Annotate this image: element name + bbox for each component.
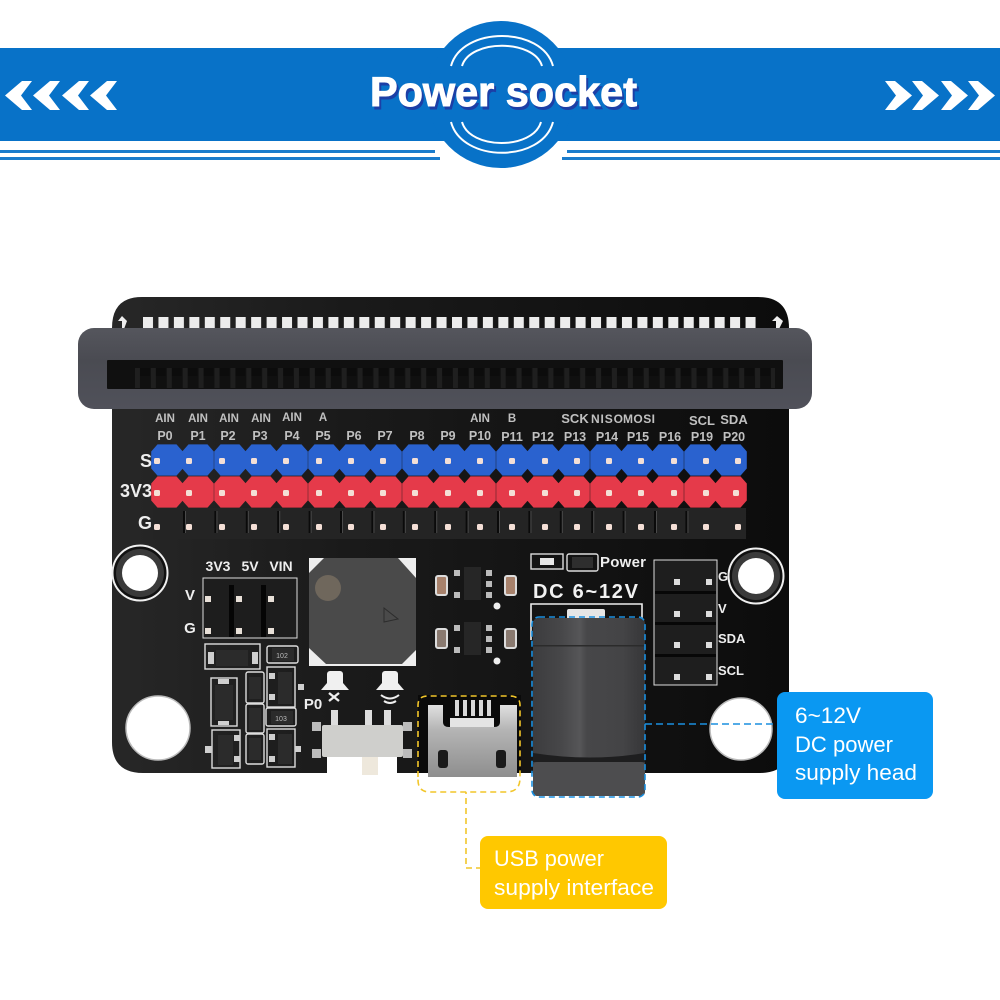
LED resistor	[567, 554, 598, 571]
callout text	[494, 846, 654, 900]
header block	[203, 578, 297, 638]
capacitors	[436, 576, 516, 648]
test points	[494, 602, 500, 664]
header row dividers	[655, 591, 716, 657]
pin labels bottom row: P7	[377, 429, 393, 443]
pin labels top row: SDA	[720, 412, 748, 427]
mute bell icon	[321, 671, 349, 690]
pin labels bottom row: P1	[190, 429, 206, 443]
header labels: G	[184, 620, 196, 637]
header labels: SCL	[718, 663, 744, 678]
pin labels top row: AIN	[188, 413, 208, 425]
pin labels bottom row: P15	[627, 430, 649, 444]
USB leader line	[466, 792, 481, 868]
row labels: G	[138, 513, 152, 533]
left chevrons	[5, 81, 117, 110]
header banner	[0, 21, 1000, 168]
header pins	[674, 579, 712, 680]
callout text: supply head	[795, 760, 917, 785]
DC voltage label: DC 6~12V	[533, 581, 639, 603]
jack highlight outline	[532, 617, 645, 797]
pin labels top row: B	[508, 413, 516, 425]
switch solder pads	[312, 722, 412, 758]
power label: Power	[600, 554, 646, 571]
row labels: S	[140, 451, 152, 471]
banner medallion	[428, 21, 574, 168]
buzzer plate	[309, 558, 416, 666]
DC leader line	[645, 723, 777, 725]
circuit board	[78, 297, 812, 797]
pin labels bottom row: P19	[691, 430, 713, 444]
connector slot	[107, 360, 783, 389]
edge slot connector	[78, 328, 812, 409]
pin labels top row: A	[319, 412, 327, 424]
jack box outline	[531, 604, 642, 640]
pin labels bottom row: P14	[596, 430, 618, 444]
sound waves	[381, 695, 399, 703]
buzzer vent	[315, 575, 341, 601]
pin labels bottom row: P9	[440, 429, 456, 443]
mounting hole bottom left	[126, 696, 190, 760]
component pads	[205, 652, 304, 762]
pin labels bottom row: P6	[346, 429, 362, 443]
jack base	[533, 762, 645, 796]
power LED group	[531, 554, 646, 603]
right header	[654, 560, 746, 685]
mute mark	[329, 693, 339, 701]
callout: USB power	[480, 836, 667, 909]
switch slider	[362, 757, 378, 775]
pin labels top row: AIN	[251, 413, 271, 425]
pin labels bottom row: P13	[564, 430, 586, 444]
banner underlines	[0, 150, 1000, 160]
right chevrons	[885, 81, 995, 110]
header dividers	[229, 585, 266, 637]
jack pin	[567, 609, 605, 620]
jack band	[533, 753, 645, 762]
power jumper header	[184, 558, 297, 638]
connector body	[78, 328, 812, 409]
pin labels bottom row: P2	[220, 429, 236, 443]
pin labels bottom row: P4	[284, 429, 300, 443]
pin labels bottom row: P12	[532, 430, 554, 444]
pin labels top row: AIN	[470, 413, 490, 425]
header labels: V	[718, 601, 727, 616]
USB port	[418, 695, 521, 777]
callout: DC power	[777, 692, 933, 799]
pin labels bottom row: P3	[252, 429, 268, 443]
row labels: 3V3	[120, 481, 152, 501]
USB highlight outline	[418, 696, 520, 792]
header labels: SDA	[718, 631, 746, 646]
centre regulators	[436, 567, 516, 664]
header labels: G	[718, 569, 728, 584]
DC power jack	[532, 617, 645, 797]
pin labels top row: AIN	[282, 412, 302, 424]
banner band	[0, 48, 1000, 141]
sound bell icon	[376, 671, 404, 690]
component bodies	[215, 648, 294, 765]
P0 label: P0	[304, 696, 322, 713]
pin labels top row: SCL	[689, 413, 715, 428]
callout text: 6~12V	[795, 703, 861, 728]
resistor codes	[275, 653, 288, 723]
pin labels bottom row: P8	[409, 429, 425, 443]
callout box	[480, 836, 667, 909]
header labels	[184, 558, 293, 637]
pin labels bottom row: P11	[501, 430, 523, 444]
sound switch markings	[304, 671, 404, 713]
row labels	[120, 451, 152, 533]
mounting hole top left	[112, 546, 168, 600]
edge connector pads	[143, 317, 758, 329]
header block	[654, 560, 717, 685]
mounting hole top right	[728, 548, 784, 604]
switch legs	[331, 710, 391, 727]
USB slots	[438, 750, 506, 768]
header labels: 5V	[241, 558, 259, 574]
power row: red headers	[151, 476, 747, 508]
medallion arcs	[451, 36, 553, 153]
LED	[531, 554, 563, 569]
slot contacts	[135, 368, 775, 388]
jack collar	[533, 645, 645, 646]
pin labels bottom row: P20	[723, 430, 745, 444]
callout text	[795, 703, 917, 785]
header labels: V	[185, 587, 195, 604]
resistor codes: 102	[276, 653, 288, 660]
pin labels top row: NISO	[591, 412, 623, 426]
ground row: black headers	[153, 508, 746, 539]
signal row: blue headers	[151, 444, 747, 476]
switch body	[322, 725, 403, 757]
callout box	[777, 692, 933, 799]
header pins	[154, 458, 741, 530]
pin labels bottom row: P5	[315, 429, 331, 443]
buzzer body	[309, 558, 416, 664]
title: Power socket	[370, 68, 637, 115]
bottom left components	[205, 644, 304, 768]
slide switch	[312, 710, 412, 775]
PCB outline	[112, 297, 789, 773]
header labels: VIN	[269, 558, 293, 574]
pin labels top row: SCK	[561, 411, 589, 426]
title: Power socket	[372, 71, 639, 118]
pin labels top row: AIN	[155, 413, 175, 425]
callout text: supply interface	[494, 875, 654, 900]
pin labels bottom row: P10	[469, 429, 491, 443]
pin labels bottom row	[157, 429, 745, 444]
callout text: USB power	[494, 846, 604, 871]
header labels: 3V3	[206, 558, 231, 574]
mounting hole bottom right	[710, 698, 772, 760]
pin labels bottom row: P0	[157, 429, 173, 443]
regulator pads	[454, 570, 492, 653]
USB inner lip	[450, 718, 494, 727]
buzzer polarity mark	[384, 608, 398, 622]
USB socket backing	[418, 695, 521, 773]
resistor codes: 103	[275, 716, 287, 723]
pin labels top row: AIN	[219, 413, 239, 425]
component outlines	[205, 644, 298, 768]
pin labels top row: MOSI	[623, 412, 655, 426]
pin labels bottom row: P16	[659, 430, 681, 444]
jack barrel	[533, 618, 645, 796]
callout text: DC power	[795, 732, 893, 757]
jumper pins	[205, 596, 274, 634]
USB shell	[428, 705, 517, 777]
corner arrows	[118, 316, 783, 329]
regulator chips	[464, 567, 481, 655]
header labels	[718, 569, 746, 678]
pin labels top row	[155, 411, 748, 428]
buzzer	[309, 558, 416, 666]
USB contacts	[455, 700, 491, 716]
